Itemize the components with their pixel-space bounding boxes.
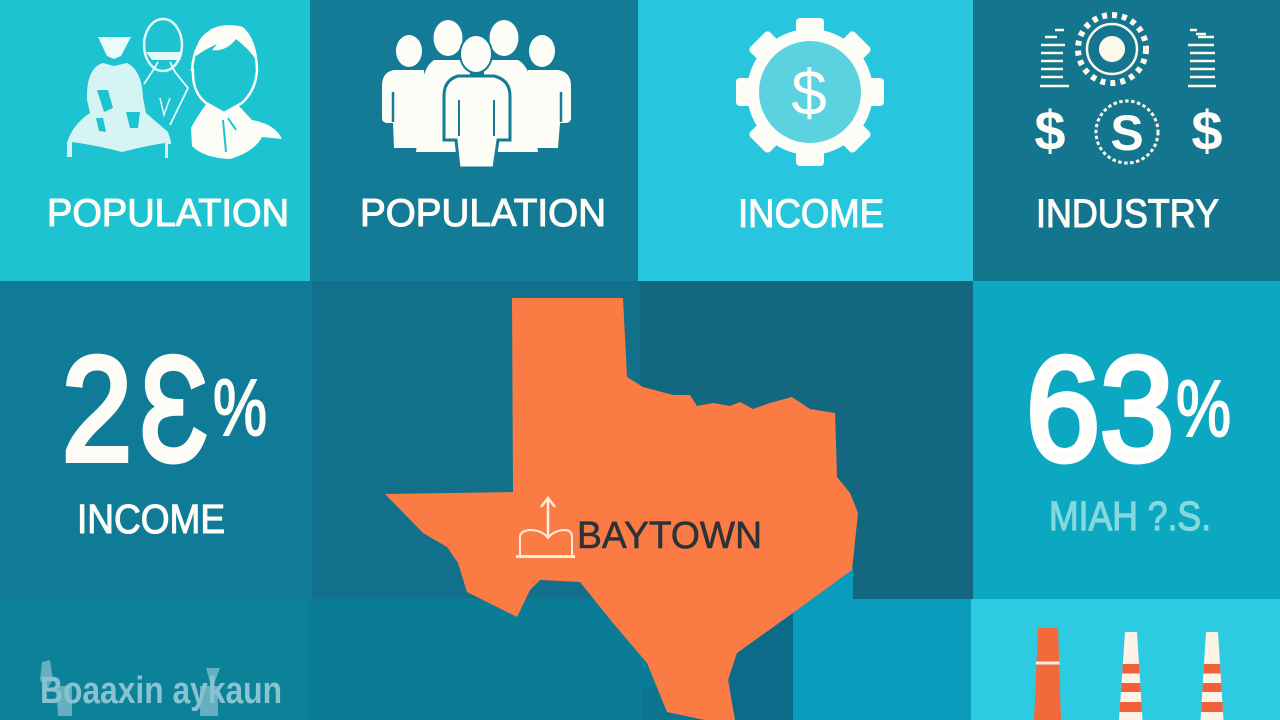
panel: bottom left <box>0 599 307 720</box>
panel: bottom middle <box>307 599 793 720</box>
panel: population one <box>0 0 310 281</box>
panel: high school stat <box>973 281 1280 599</box>
panel: chimneys <box>971 599 1280 720</box>
stat: percentage: 63 <box>1026 327 1174 492</box>
icon: industry and dollars: S <box>1110 105 1144 161</box>
icon: book with arrow <box>516 498 575 556</box>
panel: income <box>638 0 973 281</box>
panel: population two <box>310 0 638 281</box>
icon: striped chimney <box>1119 632 1142 720</box>
map: Texas outline <box>385 298 858 720</box>
stat: percentage: Ɛ <box>140 327 208 492</box>
icon: orange chimney <box>1034 628 1061 720</box>
label: population: POPULATION <box>47 192 289 235</box>
label: income: INCOME <box>77 496 225 542</box>
panel: income stat <box>0 281 312 599</box>
icon: gear with dollar <box>736 18 884 166</box>
panel: map background <box>312 281 973 599</box>
icon: gear with dollar: $ <box>791 57 827 129</box>
icon: industry and dollars: $ <box>1191 99 1223 162</box>
icon: industry and dollars: $ <box>1034 99 1066 162</box>
stat: percentage: % <box>213 363 267 452</box>
panel: bottom right blue <box>793 568 971 720</box>
icon: striped chimney <box>1200 632 1224 720</box>
stat: percentage: % <box>1176 364 1231 453</box>
label: garbled caption: MIAH ?.S. <box>1049 493 1211 539</box>
callout: Baytown marker <box>516 498 762 557</box>
text: garbled caption <box>40 660 282 716</box>
text: garbled caption: Boaaxin aykaun <box>40 670 282 712</box>
icon: group of people <box>382 20 571 168</box>
stat: percentage: 2 <box>62 327 132 492</box>
stat: percentage <box>62 327 267 492</box>
label: industry: INDUSTRY <box>1036 192 1219 236</box>
icon: industry and dollars <box>1034 15 1223 163</box>
panel: industry <box>973 0 1280 281</box>
label: population: POPULATION <box>360 192 606 235</box>
label: Baytown: BAYTOWN <box>577 515 762 557</box>
icon: three people outlines <box>67 19 282 159</box>
label: income: INCOME <box>738 192 884 236</box>
